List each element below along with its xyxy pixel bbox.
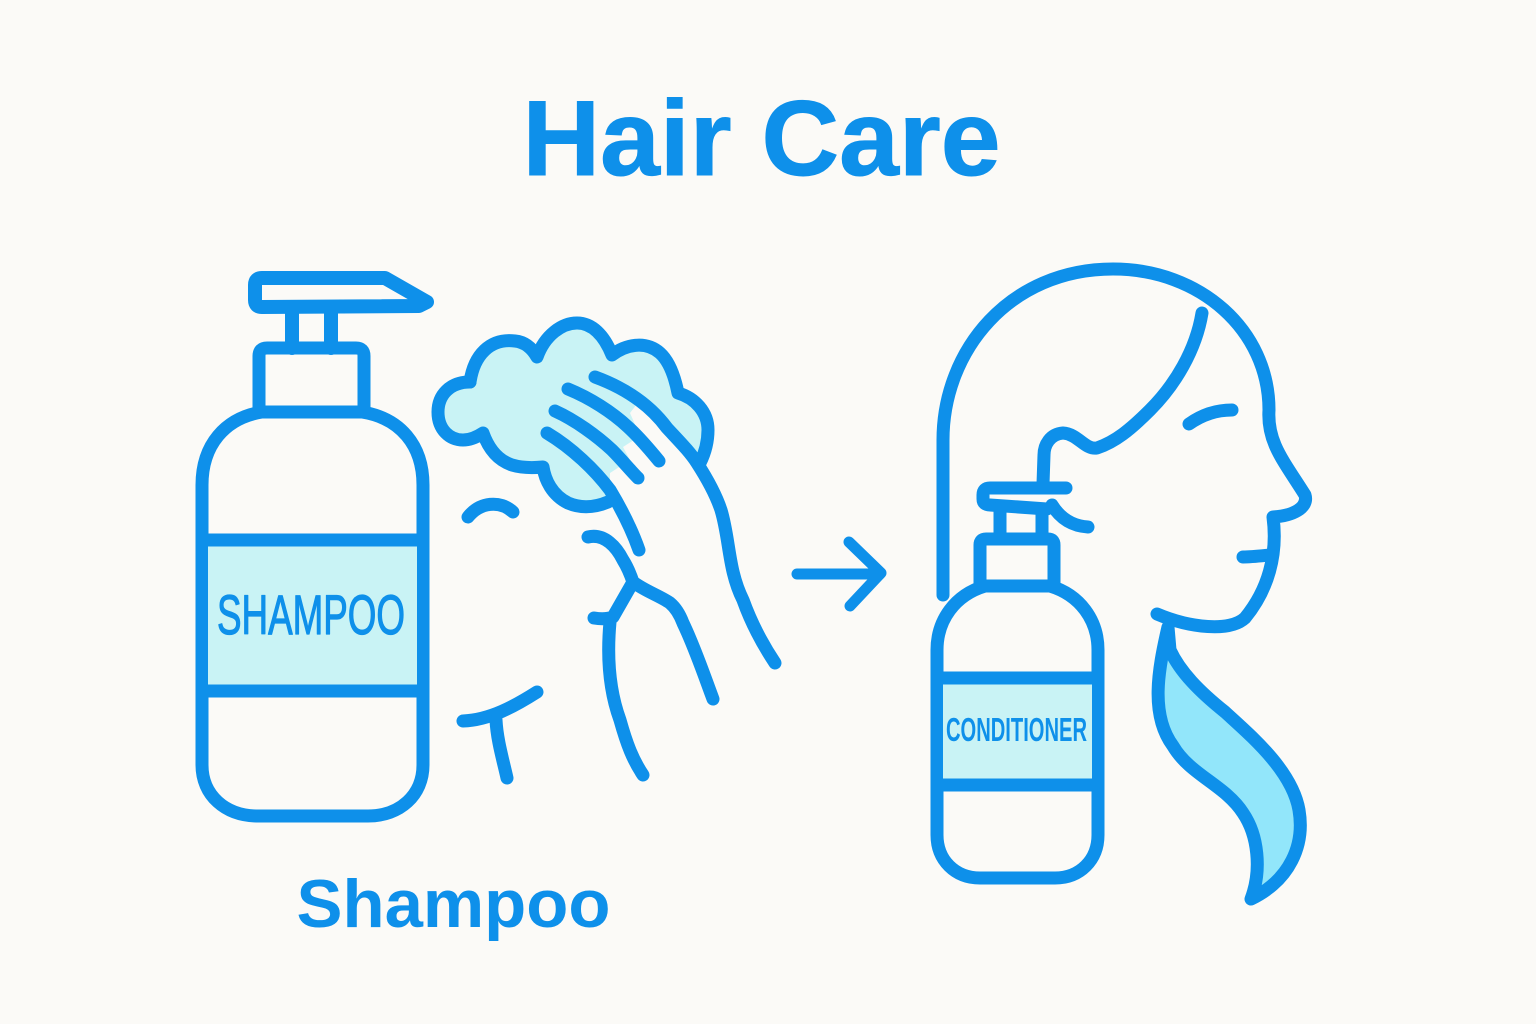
icon: conditioner bottle <box>937 488 1098 878</box>
shampoo label: SHAMPOO <box>217 583 405 646</box>
icon: shampoo bottle <box>202 278 427 816</box>
caption: shampoo: Shampoo <box>296 866 610 942</box>
conditioner label <box>937 678 1098 785</box>
ponytail <box>1158 627 1300 899</box>
title: Hair Care <box>522 78 1000 198</box>
mouth <box>1243 555 1270 557</box>
hook <box>1052 505 1088 527</box>
thumb and lower hand <box>588 536 633 619</box>
icon: foam and washing hand <box>438 323 775 778</box>
icon: head with hair <box>943 269 1306 899</box>
brow <box>468 504 513 517</box>
arm <box>463 692 537 721</box>
foam outline <box>470 323 708 463</box>
arrow <box>797 542 881 606</box>
conditioner label: CONDITIONER <box>946 711 1087 748</box>
hand fingers <box>595 377 775 663</box>
foam fill <box>439 323 708 506</box>
eye <box>1189 410 1232 424</box>
shampoo label <box>202 540 423 691</box>
